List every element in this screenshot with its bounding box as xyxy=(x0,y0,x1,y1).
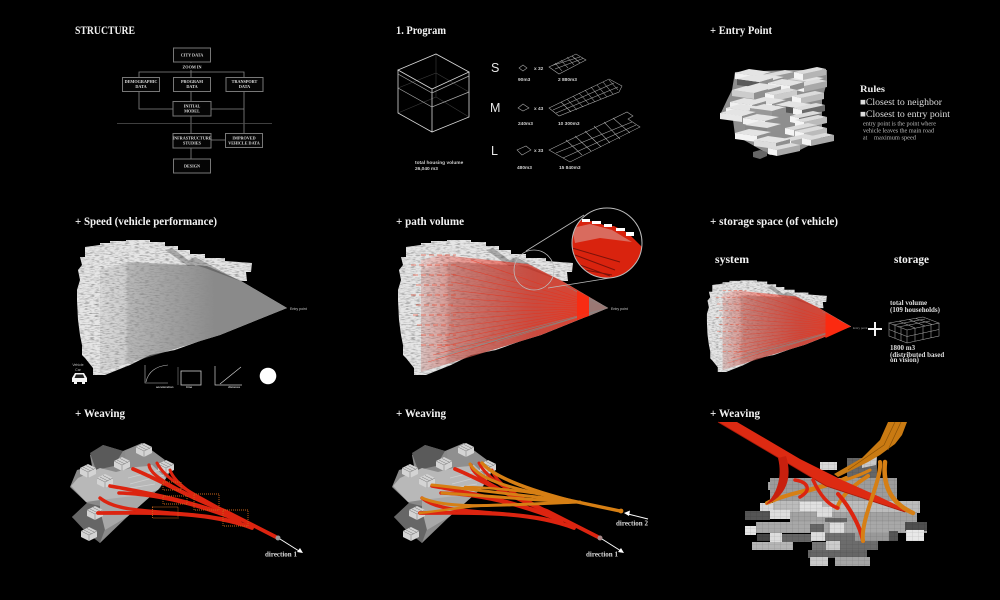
red strands xyxy=(98,463,276,537)
plate S xyxy=(549,54,586,83)
box: design: DESIGN xyxy=(184,164,200,168)
orange tubes front xyxy=(834,422,913,541)
title: weaving: + Weaving xyxy=(75,408,125,420)
panel: entry point xyxy=(710,25,950,159)
box: initial model: INITIAL xyxy=(184,104,200,108)
title: program: 1. Program xyxy=(396,25,446,37)
red strands xyxy=(420,463,598,537)
title: path volume: + path volume xyxy=(396,216,464,228)
panel: weaving direction 1 xyxy=(70,408,303,558)
box: program data xyxy=(174,78,210,92)
box: design xyxy=(174,159,210,173)
label: direction 2: direction 2 xyxy=(616,520,648,528)
chart: box plot: time xyxy=(186,385,192,389)
box: program data: DATA xyxy=(186,84,198,89)
size label L: L xyxy=(491,144,498,158)
rules text: at xyxy=(863,136,868,142)
plate M xyxy=(549,79,622,127)
box: infrastructure studies: INFRASTRUCTURE xyxy=(172,136,212,140)
text: total housing volume: 26,040 m3 xyxy=(415,166,438,172)
unit L xyxy=(517,146,544,171)
magnifier: source ring and leader lines xyxy=(514,215,610,290)
label: entry point tag: Entry point xyxy=(290,307,307,311)
highlight boxes xyxy=(152,482,248,526)
panel: weaving perspective xyxy=(710,408,927,566)
entry tag: Entry point xyxy=(853,326,868,330)
storage text bottom: on vision) xyxy=(890,356,920,364)
vehicle icon: car: Vehicle xyxy=(72,363,84,367)
vehicle icon: car xyxy=(72,363,87,384)
chart: linear speed: distance xyxy=(228,385,241,389)
block platform xyxy=(392,443,496,543)
rules text: maximum speed xyxy=(874,136,916,142)
label: direction 1: direction 1 xyxy=(265,550,297,558)
rules text: ■Closest to neighbor xyxy=(860,98,943,108)
plate L: 15 840m3 xyxy=(559,165,581,171)
magnifier: enlarged detail xyxy=(572,208,642,278)
box: city data xyxy=(174,48,210,62)
title: weaving: + Weaving xyxy=(396,408,446,420)
panel: storage space xyxy=(702,216,944,375)
stacked block cluster xyxy=(720,67,834,159)
box: transport data: TRANSPORT xyxy=(232,79,258,84)
flowchart connectors xyxy=(139,62,244,159)
chart: linear speed xyxy=(215,366,242,389)
label: entry point tag: Entry point xyxy=(611,307,628,311)
box: improved vehicle data: IMPROVED xyxy=(232,136,256,140)
unit S: x 32 xyxy=(534,66,544,72)
heading: storage: storage xyxy=(894,254,929,266)
chart: acceleration curve: acceleration xyxy=(156,385,174,389)
panel: path volume xyxy=(391,208,645,380)
box: demographic data: DEMOGRAPHIC xyxy=(125,79,157,84)
box: initial model xyxy=(173,102,211,116)
panel: program xyxy=(396,25,640,172)
unit M: 240m3 xyxy=(518,121,533,127)
arrow: direction 2 xyxy=(624,510,648,519)
red tubes xyxy=(718,422,913,541)
rules text xyxy=(860,85,950,142)
storage grid box xyxy=(889,317,939,343)
panel: structure flowchart xyxy=(75,25,272,173)
unit S xyxy=(518,65,544,83)
wireframe housing volume cube xyxy=(398,54,469,132)
rules text: Rules xyxy=(860,85,885,95)
unit M: x 43 xyxy=(534,106,544,112)
label: zoom in: ZOOM IN xyxy=(183,64,201,70)
storage text top: (109 households) xyxy=(890,306,941,314)
unit S: 90m3 xyxy=(518,77,531,83)
box: transport data: DATA xyxy=(239,84,250,89)
unit L: x 33 xyxy=(534,148,544,154)
size label M: M xyxy=(490,101,500,115)
plus sign xyxy=(868,322,882,336)
box: initial model: MODEL xyxy=(184,108,200,114)
plate M: 10 300m3 xyxy=(558,121,580,127)
box: demographic data xyxy=(122,78,160,92)
rules text: entry point is the point where xyxy=(863,122,936,128)
rules text: ■Closest to entry point xyxy=(860,110,950,120)
wireframe block base xyxy=(745,457,927,566)
box: demographic data: DATA xyxy=(135,84,147,89)
box: improved vehicle data: VEHICLE DATA xyxy=(228,140,260,146)
heading: system: system xyxy=(715,254,749,266)
divider xyxy=(117,122,272,124)
orange tubes behind xyxy=(767,470,870,508)
unit M xyxy=(518,104,544,127)
block platform xyxy=(70,443,174,543)
fan with red path volume xyxy=(391,235,616,380)
title: entry point: + Entry Point xyxy=(710,25,772,37)
title: speed: + Speed (vehicle performance) xyxy=(75,216,217,228)
icon: white circle xyxy=(260,368,276,384)
fan: system diagram xyxy=(702,277,856,375)
text: total housing volume: total housing volume xyxy=(415,161,463,166)
panel: weaving two directions xyxy=(392,408,648,558)
box: improved vehicle data xyxy=(226,134,262,148)
storage text bottom: (distributed based xyxy=(890,351,944,359)
vehicle icon: car: Car xyxy=(75,368,82,372)
unit L: 480m3 xyxy=(517,165,532,171)
box: infrastructure studies xyxy=(172,134,212,148)
box: infrastructure studies: STUDIES xyxy=(183,140,202,146)
chart: box plot xyxy=(178,367,201,389)
plate S: 2 880m3 xyxy=(558,77,577,83)
title: structure: STRUCTURE xyxy=(75,25,135,37)
panel: speed xyxy=(70,216,307,389)
chart: acceleration curve xyxy=(145,365,174,389)
label: zoom in xyxy=(182,63,201,70)
rules text: vehicle leaves the main road xyxy=(863,128,934,134)
storage text bottom: 1800 m3 xyxy=(890,344,915,352)
storage text top: total volume xyxy=(890,299,927,307)
box: city data: CITY DATA xyxy=(181,52,203,58)
size label S: S xyxy=(491,61,499,75)
orange strands xyxy=(420,463,623,513)
fan of paths over blocks xyxy=(70,235,295,380)
box: transport data xyxy=(226,78,263,92)
plate L xyxy=(549,112,640,171)
label: direction 1: direction 1 xyxy=(586,550,618,558)
title: storage space: + storage space (of vehicle) xyxy=(710,216,838,228)
title: weaving: + Weaving xyxy=(710,408,760,420)
arrow: direction 1 xyxy=(598,536,624,553)
arrow: direction 1 xyxy=(276,536,303,553)
box: program data: PROGRAM xyxy=(181,79,203,84)
